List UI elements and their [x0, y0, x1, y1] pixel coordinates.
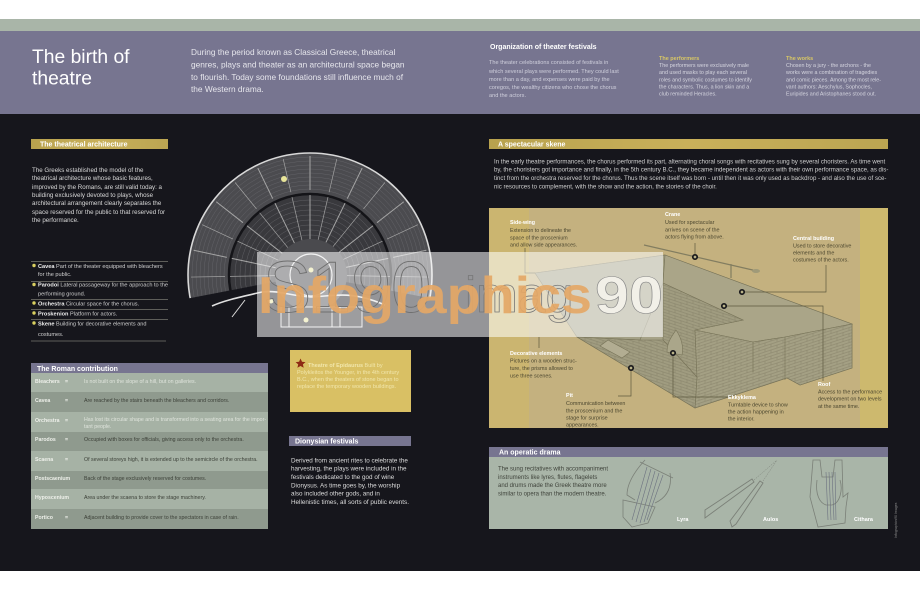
text: skene intro: by, the choristers got importance and finally, in the 5th century B.C., they became independent as actors with their own performance space, as dis- [494, 166, 888, 174]
callout: side-wing: Side-wing [510, 220, 535, 226]
callout: pit: Communication between [566, 401, 625, 407]
text: architecture intro: space reserved for the public to that reserved for [32, 209, 165, 216]
heading: theatrical architecture: The theatrical architecture [40, 142, 128, 148]
title: theatre [32, 68, 92, 90]
heading: spectacular skene: A spectacular skene [498, 142, 566, 148]
legend: theatre parts: performing ground. [38, 292, 86, 298]
callout: crane: arrives on scene of the [665, 228, 720, 234]
text: the performers: club reminded Heracles. [659, 92, 717, 98]
icon: lyre [623, 460, 673, 527]
text: Dionysian festivals body: also included other gods, and in [291, 490, 380, 498]
callout text: Polykleitos the Younger, in the 4th century [297, 370, 399, 376]
text: Dionysian festivals body: Hellenistic times, all sorts of public events. [291, 499, 409, 506]
chart: theatre plan [187, 152, 433, 328]
panel: the theatrical architecture [31, 139, 168, 341]
heading: organization of theater festivals: Organization of theater festivals [490, 44, 597, 51]
callout: central building: Central building [793, 236, 834, 242]
text: the works: works were a combination of tragedies [785, 70, 878, 76]
text: architecture intro: building exclusively devoted to plays, whose [32, 192, 154, 199]
title: The birth of [32, 47, 130, 68]
text: architecture intro: improved by the Romans, are still valid today: a [32, 184, 163, 191]
table labels: = [65, 379, 68, 385]
text: the performers: the characters. Thus, a lion skin and a [659, 84, 749, 90]
callout: central building: Used to store decorative [793, 244, 851, 250]
table labels: Scaena [35, 457, 53, 463]
table labels: Orchestra [35, 418, 60, 424]
text: festival organization: which several plays were performed. They could last [488, 69, 619, 75]
callout: decorative elements: Pictures on a wooden struc- [510, 358, 577, 364]
text: skene intro [494, 158, 888, 190]
text: the works: The works [786, 56, 813, 62]
heading: operatic drama: An operatic drama [499, 450, 561, 456]
legend: theatre parts: Skene Building for decorative elements and [38, 322, 147, 328]
legend: theatre parts: Parodoi Lateral passageway for the approach to the [38, 282, 168, 288]
table labels: Bleachers [35, 379, 60, 385]
callout: side-wing [510, 220, 577, 248]
callout: central building: elements and the [793, 250, 834, 256]
table descriptions: Occupied with boxes for officials, giving access only to the orchestra. [84, 437, 244, 443]
callout leader lines [525, 243, 826, 397]
text: architecture intro: theatrical architecture whose basic features, [32, 175, 153, 182]
watermark: 90 [595, 267, 663, 325]
callout: side-wing: space of the proscenium [510, 236, 568, 242]
table labels: = [65, 398, 68, 404]
table labels: = [65, 418, 68, 424]
building walls and stage [535, 255, 852, 408]
text: the works: and comic pieces. Among the most rele- [786, 78, 881, 84]
callout text: Theatre of Epidaurus Built by [308, 363, 383, 369]
callout markers [629, 255, 744, 370]
panel: header band [0, 31, 920, 114]
text: the performers: The performers [659, 56, 699, 62]
icon: cithara [810, 460, 848, 527]
callout text: B.C., when the theaters of stone began to [297, 377, 399, 383]
callout: theatre of Epidaurus [290, 350, 411, 412]
callout: central building: costumes of the actors. [793, 258, 849, 264]
table descriptions: Of several storeys high, it is extended up to the semicircle of the orchestra. [84, 457, 258, 463]
table descriptions: Is not built on the slope of a hill, but on galleries. [84, 379, 196, 385]
text: architecture intro [32, 167, 165, 224]
text: skene intro: In the early theatre performances, the chorus performed its part, alternating choral songs with recitatives sung by several choristers. As time went [494, 158, 886, 166]
table labels: Postscaenium [35, 476, 71, 482]
text: Dionysian festivals body: festivals dedicated to the god of wine [291, 474, 395, 481]
text: operatic drama body: and drums made the Greek theatre more [498, 483, 607, 489]
diagram: skene cutaway [489, 208, 888, 428]
table descriptions: Has lost its circular shape and is transformed into a seating area for the impor- [84, 417, 266, 423]
callout: pit [566, 393, 625, 428]
label: lyra: Lyra [677, 517, 689, 523]
text: the works: Euripides and Aristophanes stood out. [786, 92, 876, 98]
watermark: S190 [263, 248, 431, 328]
text: the performers: and used masks to play each several [659, 70, 747, 76]
title [32, 47, 130, 90]
callout: pit: stage for surprise [566, 416, 608, 422]
watermark: Infographics [258, 267, 592, 325]
intro text: During the period known as Classical Greece, theatrical [191, 47, 395, 57]
text: the works: Chosen by a jury - the archons - the [786, 63, 871, 69]
heading: Dionysian festivals: Dionysian festivals [295, 438, 359, 446]
text: architecture intro: the performance. [32, 217, 79, 224]
watermark [257, 248, 663, 337]
panel: the Roman contribution [31, 363, 268, 529]
panel: a spectacular skene [489, 139, 888, 190]
table descriptions: Area under the scaena to store the stage machinery. [84, 495, 206, 501]
callout: roof: Access to the performance [818, 390, 882, 396]
text: the works: vant authors: Aeschylus, Sophocles, [786, 84, 872, 90]
heading: operatic drama [489, 447, 888, 457]
table labels: Cavea [35, 398, 50, 404]
text: the performers: roles and symbolic costumes to identify [659, 78, 752, 84]
table labels: = [65, 457, 68, 463]
table descriptions: Are reached by the stairs beneath the bleachers and corridors. [84, 398, 229, 404]
label: aulos: Aulos [763, 517, 778, 523]
table labels: Hyposcenium [35, 495, 69, 501]
intro text: genres, plays and theater as an architectural space began [191, 60, 405, 70]
callout: crane [665, 212, 724, 240]
text: festival organization: more than a day, and expenses were paid by the [489, 77, 610, 83]
table labels [35, 379, 71, 521]
heading: spectacular skene [489, 139, 888, 149]
intro text: to flourish. Today some foundations still influence much of [191, 72, 404, 82]
callout: crane: actors flying from above. [665, 234, 724, 240]
table descriptions: tant people. [84, 424, 111, 430]
callout text [297, 363, 399, 390]
callout: ekkyklema [728, 395, 788, 422]
callout: decorative elements: use three scenes. [510, 374, 553, 380]
callout: central building [793, 236, 851, 264]
text: operatic drama body: similar to opera than the modern theatre. [498, 492, 607, 498]
text: festival organization: coregos, the wealthy citizens who chose the chorus [489, 85, 617, 91]
intro text [191, 47, 405, 94]
callout: decorative elements [510, 351, 577, 380]
callout: ekkyklema: the interior. [728, 416, 755, 422]
table descriptions: Adjacent building to provide cover to the spectators in case of rain. [84, 515, 239, 521]
text: architecture intro: architectural arrangement clearly separates the [32, 200, 162, 207]
callout: crane: Used for spectacular [665, 220, 715, 226]
callout: side-wing: and allow side appearances. [510, 242, 577, 248]
callout: pit: appearances. [566, 422, 599, 428]
text: festival organization: and the actors. [489, 93, 526, 99]
text: Dionysian festivals body: Dionysus. As time goes by, the worship [291, 482, 401, 490]
crane [644, 245, 757, 278]
table labels: = [65, 515, 68, 521]
table descriptions: Back of the stage exclusively reserved for costumes. [84, 476, 206, 482]
callout: ekkyklema: Turntable device to show [728, 402, 788, 408]
text: skene intro: nic resources to complement, with the show and the action, the stories of the choir. [494, 184, 717, 190]
label: cithara: Cithara [854, 517, 874, 523]
text: operatic drama body [498, 466, 608, 498]
text: the performers [659, 56, 752, 98]
text: skene intro: tinct from the orchestra reserved for the chorus. Thus the scene itself was born - until then it was only used as backdrop - and also the use of sce- [494, 175, 886, 182]
heading: theatrical architecture [31, 139, 168, 149]
callout: pit: Pit [566, 393, 573, 399]
credit text: Infographics90 Images [894, 502, 898, 538]
callout: side-wing: Extension to delineate the [510, 228, 571, 234]
legend: theatre parts: Proskenion Platform for actors. [38, 312, 118, 318]
table labels: Parodos [35, 437, 56, 443]
legend: theatre parts [31, 262, 168, 341]
callout: roof: at the same time. [818, 404, 859, 410]
callout text: replace the temporary wooden buildings. [297, 384, 397, 390]
watermark: imag [465, 267, 573, 323]
text: operatic drama body: The sung recitatives with accompaniment [498, 466, 608, 472]
callout: pit: the proscenium and the [566, 408, 622, 414]
table labels: Portico [35, 515, 53, 521]
heading: Roman contribution: The Roman contribution [37, 366, 118, 373]
callout: decorative elements: ture, the prisms allowed to [510, 366, 573, 372]
callout: roof: development on two levels [818, 396, 882, 402]
text: festival organization: The theater celebrations consisted of festivals in [489, 60, 608, 66]
callout: roof: Roof [818, 382, 830, 388]
callout: ekkyklema: Ekkyklema [728, 395, 757, 401]
text: operatic drama body: instruments like lyres, flutes, flagelets [498, 475, 597, 481]
text: festival organization [488, 60, 619, 99]
legend: theatre parts: Orchestra Circular space for the chorus. [38, 302, 139, 308]
icon: aulos [705, 460, 777, 527]
panel: an operatic drama [489, 447, 888, 529]
legend: theatre parts: costumes. [38, 332, 64, 338]
icon: star [296, 358, 306, 368]
intro text: the Western drama. [191, 84, 264, 94]
legend: theatre parts: for the public. [38, 272, 72, 278]
callout: roof [818, 382, 882, 410]
text: Dionysian festivals body: harvesting, the plays were included in the [291, 466, 407, 472]
callout: crane: Crane [665, 212, 680, 218]
callout: ekkyklema: the action happening in [728, 410, 784, 416]
table descriptions [84, 379, 266, 521]
legend: theatre parts: Cavea Part of the theater equipped with bleachers [38, 264, 163, 270]
text: architecture intro: The Greeks established the model of the [32, 167, 144, 174]
text: the performers: The performers were exclusively male [659, 63, 749, 69]
text: Dionysian festivals body: Derived from ancient rites to celebrate the [291, 458, 408, 464]
text: Dionysian festivals body [291, 458, 409, 506]
panel: Dionysian festivals [289, 436, 411, 506]
table labels: = [65, 437, 68, 443]
callout: decorative elements: Decorative elements [510, 351, 562, 357]
heading: Roman contribution [31, 363, 268, 373]
text: the works [785, 56, 881, 98]
